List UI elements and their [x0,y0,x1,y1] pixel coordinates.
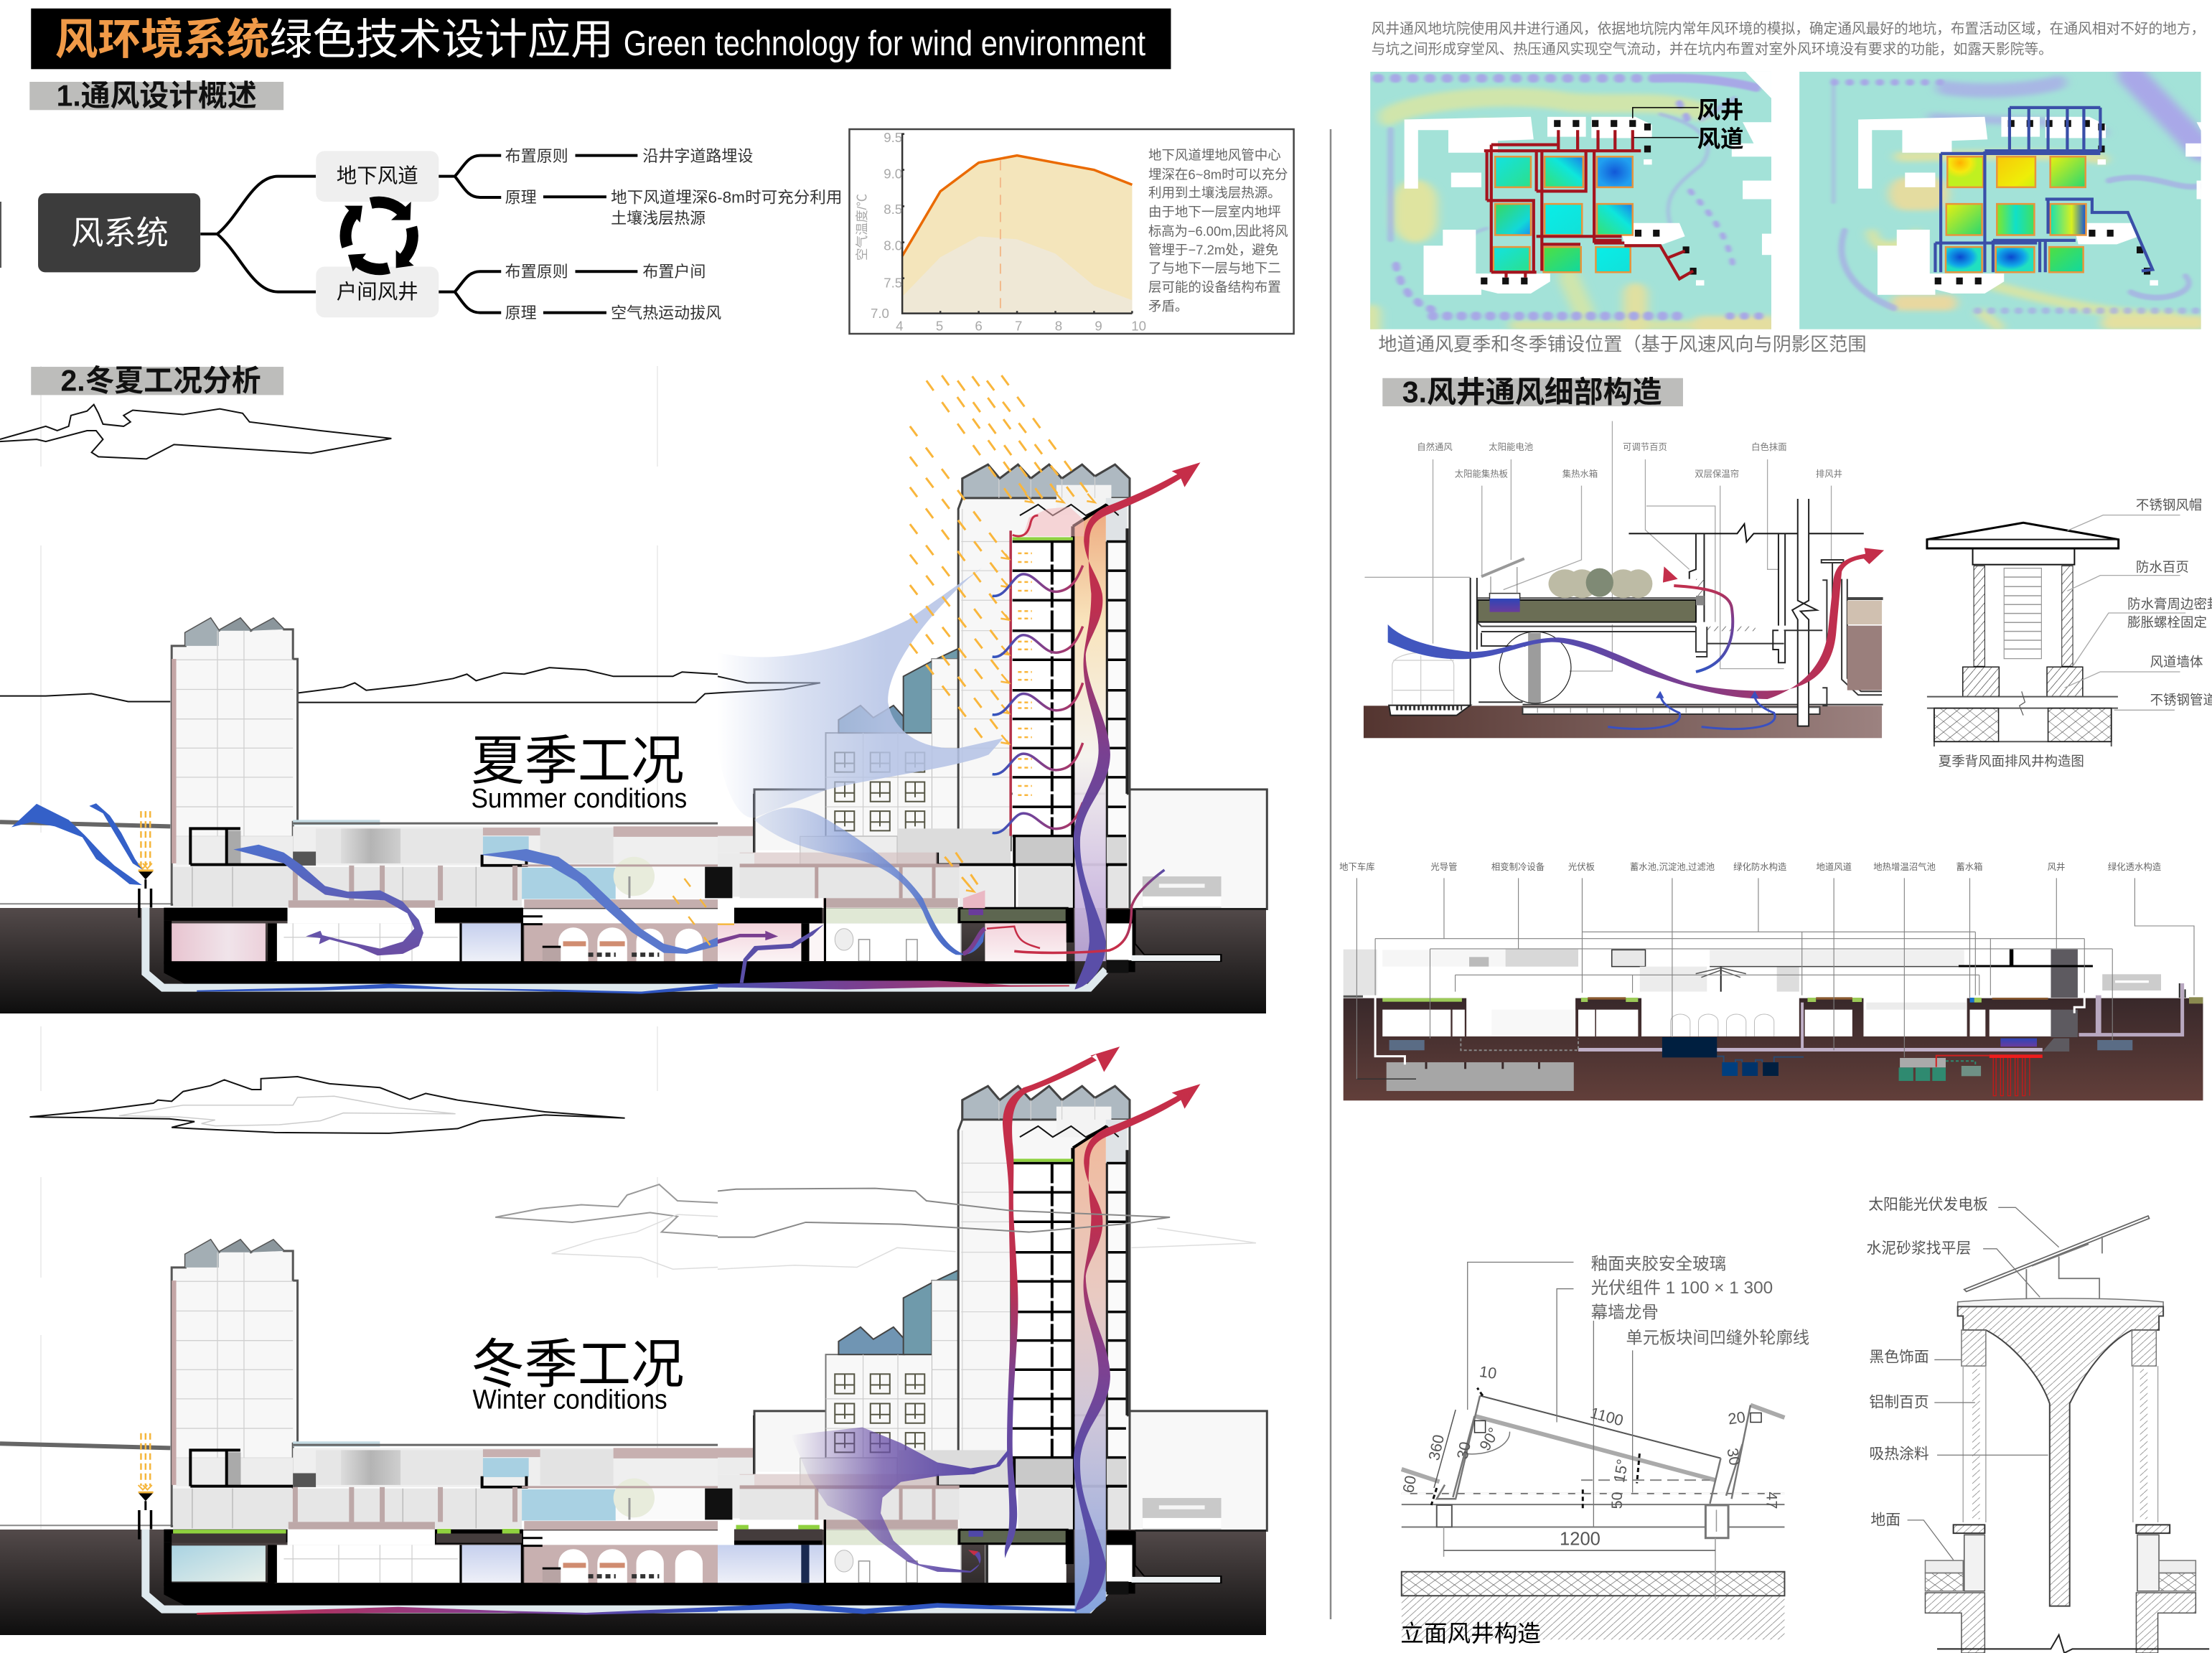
detail section labels: 可调节百页 [1623,442,1667,452]
leader lines [1364,421,1832,671]
chart note text: 埋深在6~8m时可以充分 [1148,167,1288,182]
panel: winter section [0,1046,1267,1635]
section labels: 风井 [2048,862,2065,872]
chart note text: 由于地下一层室内地坪 [1148,204,1281,219]
chart axis labels: 8.0 [884,238,902,253]
panel: solar chimney detail [1866,1197,2209,1653]
section labels: 光伏板 [1568,862,1595,872]
shaft and exhaust wind [718,1084,1200,1614]
chart note text: 矛盾。 [1148,299,1188,314]
chart axis labels: 8.5 [884,202,902,217]
section labels: 地热增温沼气池 [1873,861,1936,872]
section labels [1339,861,2162,872]
winter ground tone [139,1433,718,1615]
chart axis labels: 9.5 [884,130,902,145]
left edge tick [0,202,1,268]
PV detail text: 90° [1476,1425,1503,1453]
PV detail text: 47 [1763,1492,1781,1509]
chart axis labels: 10 [1131,319,1146,334]
PV detail text: 15° [1610,1458,1631,1484]
chart axis labels: 空气温度/℃ [855,194,869,261]
detail section labels: 太阳能电池 [1489,441,1533,452]
mind map nodes and labels: 地下风道埋深6-8m时可充分利用 [611,189,842,207]
chart: air temperature vs burial depth [849,129,1294,334]
PV detail text: 30 [1723,1446,1744,1466]
winter clouds behind [29,1077,718,1269]
chimney labels: 黑色饰面 [1869,1349,1929,1365]
chart note text: 地下风道埋地风管中心 [1148,148,1281,163]
section labels: 绿化透水构造 [2108,861,2162,872]
intro paragraph [1372,22,2205,57]
summer label: Summer conditions [472,783,687,814]
chart axis labels: 6 [975,319,983,334]
mind map nodes and labels: 风系统 [71,215,169,251]
map caption: 地道通风夏季和冬季铺设位置（基于风速风向与阴影区范围 [1378,334,1866,355]
mind map nodes and labels: 布置原则 [505,147,568,165]
detail section labels [1417,441,1842,479]
map: winter duct layout [1799,72,2212,329]
heading: section 3: 3.风井通风细部构造 [1402,375,1662,408]
section labels: 蓄水箱 [1956,861,1983,872]
mind map nodes and labels: 地下风道 [337,165,418,188]
panel: PV facade shaft detail [1399,1254,1809,1647]
chart axis labels: 9 [1095,319,1102,334]
winter label: 冬季工况 [472,1334,684,1395]
PV detail text: 10 [1478,1362,1498,1382]
panel: long site section with equipment [1339,861,2203,1100]
chart axis labels: 7.0 [871,306,889,321]
PV detail text: 50 [1608,1492,1626,1509]
chart note text: 标高为−6.00m,因此将风 [1148,223,1288,238]
shaft cap labels: 风道墙体 [2150,654,2203,669]
intro paragraph: 与坑之间形成穿堂风、热压通风实现空气流动，并在坑内布置对室外风环境没有要求的功能，如露天影院等。 [1372,42,2053,57]
section labels: 地道风道 [1817,862,1852,872]
chimney labels: 铝制百页 [1869,1394,1929,1410]
building section [0,464,1267,1013]
PV detail text [1399,1254,1809,1549]
panel: ventilation detail section [1364,421,1884,738]
chimney labels: 太阳能光伏发电板 [1868,1197,1988,1213]
heading: section 2: 2.冬夏工况分析 [61,365,261,398]
chart axis labels [855,130,1146,334]
detail section labels: 太阳能集热板 [1455,468,1508,479]
wind streams left half [11,803,718,994]
building section repeated [0,1086,1267,1635]
PV detail text: 1100 [1588,1403,1625,1430]
panel: wind system mind map [38,147,842,322]
title banner: 绿色技术设计应用 [269,16,614,64]
clouds [0,405,718,703]
intro paragraph: 风井通风地坑院使用风井进行通风，依据地坑院内常年风环境的模拟，确定通风最好的地坑，布置活动区域，在通风相对不好的地方， [1372,22,2205,37]
chart axis labels: 5 [936,319,943,334]
mind map nodes and labels: 沿井字道路埋设 [642,147,753,165]
title banner [31,9,1171,69]
map labels [1697,97,1743,152]
mind map nodes and labels: 原理 [505,189,537,207]
shaft cap labels: 防水百页 [2136,560,2189,575]
detail section labels: 自然通风 [1417,441,1453,452]
section labels: 蓄水池,沉淀池,过滤池 [1630,862,1715,872]
chart note text: 管埋于−7.2m处，避免 [1148,242,1278,257]
section labels: 绿化防水构造 [1733,861,1787,872]
chart axis labels: 7.5 [884,276,902,291]
PV detail text: 360 [1425,1433,1448,1462]
chart note text [1148,148,1288,314]
PV detail text: 单元板块间凹缝外轮廓线 [1626,1328,1809,1347]
chimney labels: 地面 [1870,1512,1901,1528]
shaft cap labels [1939,497,2212,769]
summer label: 夏季工况 [472,730,684,790]
chimney labels: 水泥砂浆找平层 [1866,1240,1971,1257]
chart axis labels: 4 [896,319,903,334]
chart note text: 利用到土壤浅层热源。 [1148,185,1281,200]
title banner: Green technology for wind environment [624,24,1145,63]
main exhaust wind in shaft [1074,462,1200,990]
branch connectors [200,156,637,313]
chimney labels [1866,1197,1988,1528]
divider between left and right columns [1330,129,1331,1619]
detail section labels: 集热水箱 [1562,468,1598,479]
shaft cap labels: 夏季背风面排风井构造图 [1939,754,2084,769]
winter label: Winter conditions [472,1384,667,1415]
mind map nodes and labels: 布置原则 [505,263,568,281]
map labels: 风道 [1697,126,1743,152]
mind map nodes and labels: 空气热运动拔风 [611,304,721,322]
PV detail text: 幕墙龙骨 [1591,1303,1659,1321]
chimney labels: 吸热涂料 [1869,1446,1929,1462]
heading: section 1: 1.通风设计概述 [57,80,257,113]
PV detail text: 20 [1727,1408,1746,1428]
panel: wind simulation maps [1370,72,2212,355]
PV detail text: 釉面夹胶安全玻璃 [1591,1254,1726,1273]
map: summer duct layout [1370,72,1771,329]
section labels: 地下车库 [1339,861,1375,872]
room cross ventilation arrows [993,566,1083,833]
PV detail text: 60 [1399,1474,1420,1494]
chart note text: 了与地下一层与地下二 [1148,261,1281,276]
panel: exhaust shaft cap detail [1927,497,2212,769]
icon: cycle arrows [345,202,414,271]
chart axis labels: 8 [1055,319,1062,334]
caption: facade shaft: 立面风井构造 [1400,1620,1541,1647]
panel: summer section [0,375,1267,1013]
detail section labels: 白色抹面 [1751,441,1787,452]
section drawing [1344,878,2203,1100]
shaft cap labels: 不锈钢风帽 [2136,497,2202,512]
PV detail text: 光伏组件 1 100 × 1 300 [1591,1278,1773,1297]
chart axis labels: 9.0 [884,166,902,181]
mind map nodes and labels: 土壤浅层热源 [611,210,706,228]
PV detail text: 30 [1453,1440,1474,1461]
mind map nodes and labels [38,147,842,322]
mind map nodes and labels: 户间风井 [337,281,418,304]
tower shaft and wind right half [718,375,1200,990]
sunlight [910,375,1095,891]
chart note text: 层可能的设备结构布置 [1148,279,1281,294]
summer interior colours left [172,923,266,961]
map labels: 风井 [1697,97,1743,123]
mind map nodes and labels: 原理 [505,304,537,322]
section labels: 光导管 [1430,861,1458,872]
detail section labels: 双层保温帘 [1695,468,1739,479]
faint guide lines [41,366,657,1586]
second exhaust, intake fork, tunnel wind [718,1046,1256,1614]
chart axis labels: 7 [1015,319,1022,334]
shaft cap labels: 膨胀螺栓固定 [2127,614,2207,629]
title banner: 风环境系统 [55,16,269,64]
PV detail text: 1200 [1560,1529,1601,1549]
section labels: 相变制冷设备 [1491,861,1545,872]
detail section labels: 排风井 [1816,469,1842,479]
mind map nodes and labels: 布置户间 [642,263,706,281]
